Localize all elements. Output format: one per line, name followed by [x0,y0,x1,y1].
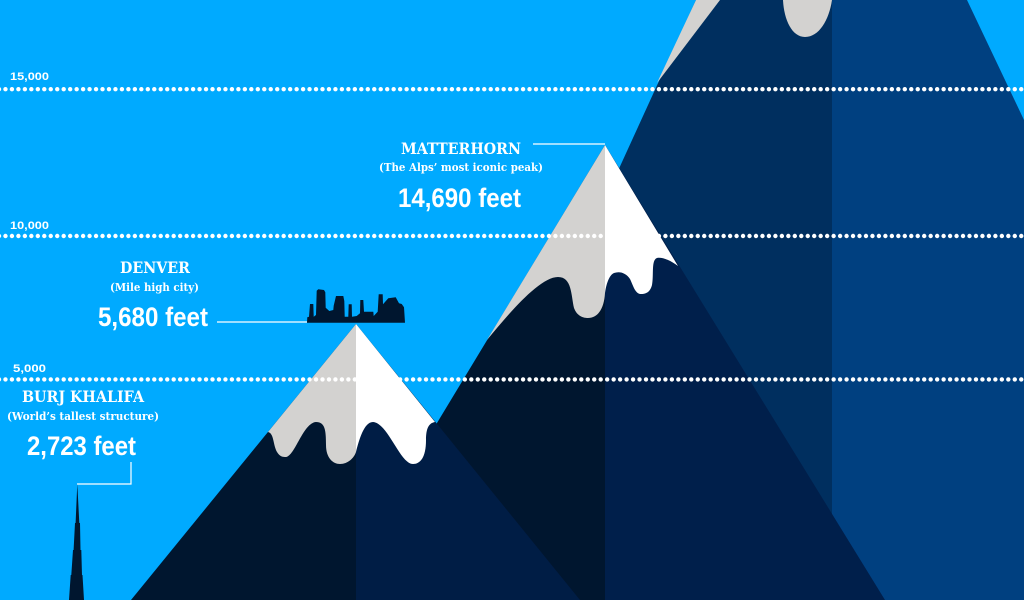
Denver description: (Mile high city) [110,280,199,294]
elevation labels [10,71,49,375]
Burj Khalifa leader line [77,462,131,484]
Burj Khalifa name: BURJ KHALIFA [22,387,145,406]
label 5,000: 5,000 [13,363,46,375]
Denver mountain shaded side [131,324,356,600]
Denver leader line [217,321,307,323]
Matterhorn name: MATTERHORN [401,139,521,158]
back mountain snow sliver [657,0,720,83]
Burj Khalifa callout [7,387,159,484]
Burj Khalifa description: (World’s tallest structure) [7,409,159,423]
back mountain shaded side [422,0,832,600]
Matterhorn shaded side [330,145,605,600]
label 15,000: 15,000 [10,71,49,83]
label 10,000: 10,000 [10,220,49,232]
Denver callout [98,258,307,332]
elevation gridlines [0,89,1024,379]
Denver mountain grey snow cap [268,324,356,464]
Matterhorn lit side [605,145,885,600]
Denver mountain white snow cap [356,324,435,464]
back mountain snow drip [783,0,832,37]
Matterhorn white snow cap [605,145,678,294]
Denver name: DENVER [120,258,191,277]
icon: Denver skyline [307,289,405,323]
icon: Burj Khalifa tower [69,484,84,600]
back mountain lit side [832,0,1024,600]
Burj Khalifa height: 2,723 feet [27,431,136,461]
tall back mountain [422,0,1024,600]
Denver mountain [131,324,580,600]
Matterhorn height: 14,690 feet [398,183,521,213]
Matterhorn mountain [330,145,885,600]
Matterhorn leader line [533,143,605,145]
Denver height: 5,680 feet [98,302,208,332]
Matterhorn grey snow cap [487,145,605,340]
Matterhorn callout [379,139,605,213]
Matterhorn description: (The Alps’ most iconic peak) [379,160,543,174]
Denver mountain lit side [356,324,580,600]
